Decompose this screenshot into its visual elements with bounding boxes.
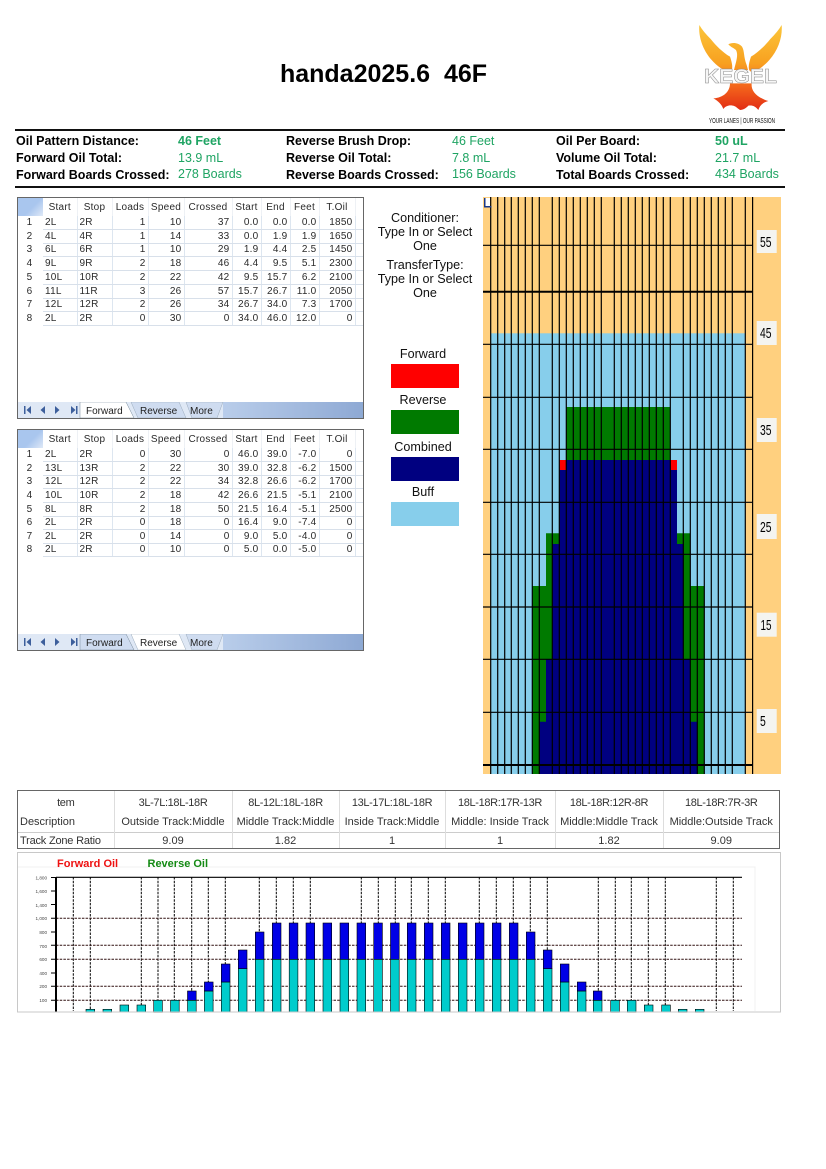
distance labels: 45 xyxy=(760,326,772,342)
panel: forward table: Loads xyxy=(116,202,144,212)
table: track zone ratio: Middle:Middle Track xyxy=(560,816,658,828)
panel: forward table: 12L xyxy=(45,299,62,310)
panel: pattern statistics: Reverse Boards Crossed: xyxy=(286,168,439,182)
panel: reverse table: 22 xyxy=(170,476,182,487)
panel: reverse table: 0 xyxy=(347,544,352,555)
table: track zone ratio: 18L-18R:17R-13R xyxy=(458,796,542,808)
panel: forward table: 6L xyxy=(45,244,57,255)
panel: pattern statistics: 7.8 mL xyxy=(452,150,490,164)
panel: pattern statistics: 156 Boards xyxy=(452,167,516,181)
y axis labels: 1,400 xyxy=(36,903,47,908)
panel: reverse table: 39.0 xyxy=(267,449,288,460)
panel: reverse table: T.Oil xyxy=(326,434,348,444)
table: track zone ratio: 1 xyxy=(497,835,503,847)
panel: reverse table: Crossed xyxy=(188,434,228,444)
panel: reverse table: 18 xyxy=(170,517,182,528)
panel: pattern statistics: Forward Boards Crossed: xyxy=(16,168,170,182)
panel: forward table: 37 xyxy=(218,217,230,228)
panel: reverse table: 2100 xyxy=(329,490,352,500)
right wing xyxy=(749,25,782,72)
panel: forward table: 33 xyxy=(218,230,230,242)
table: track zone ratio: 9.09 xyxy=(711,835,732,847)
panel: forward table: 46.0 xyxy=(267,312,288,324)
panel: reverse table: 4 xyxy=(27,490,32,500)
panel: reverse table: 2R xyxy=(80,449,93,460)
panel: reverse table: 2 xyxy=(140,490,146,500)
panel: reverse table: 2R xyxy=(80,544,93,555)
panel: forward table: 0.0 xyxy=(273,217,288,228)
panel: forward table: 42 xyxy=(218,272,230,282)
panel: reverse table: 8L xyxy=(45,504,57,514)
distance labels: 55 xyxy=(760,235,772,251)
panel: forward table: 18 xyxy=(170,258,182,268)
panel: pattern statistics: Reverse Brush Drop: xyxy=(286,134,411,148)
panel: forward table: 5 xyxy=(27,272,32,282)
panel: reverse table: 50 xyxy=(218,504,230,514)
panel: reverse table: Start xyxy=(235,434,258,444)
panel: reverse table: 2 xyxy=(140,504,146,514)
panel: forward table: End xyxy=(266,202,285,212)
table: track zone ratio: Track Zone Ratio xyxy=(20,835,101,847)
legend: combined: Combined xyxy=(394,440,452,454)
divider top xyxy=(15,129,785,131)
bars xyxy=(86,923,704,1012)
sheet tabs: forward active: More xyxy=(190,406,213,417)
panel: forward table: 26 xyxy=(170,299,182,310)
panel: reverse table: 1 xyxy=(27,449,32,460)
panel: forward table: 29 xyxy=(218,244,230,255)
panel: forward table: 0.0 xyxy=(244,230,258,242)
text block: conditioner: Type In or Select xyxy=(378,225,472,239)
axes xyxy=(56,876,742,878)
panel: forward table: 7 xyxy=(27,299,32,310)
panel: reverse table: 32.8 xyxy=(267,462,288,474)
panel: pattern statistics xyxy=(16,134,779,182)
panel: forward table: 2300 xyxy=(329,258,352,268)
panel: forward table: 2100 xyxy=(329,272,352,282)
panel: pattern statistics: 13.9 mL xyxy=(178,150,223,164)
text block: conditioner: Conditioner: xyxy=(391,211,459,225)
panel: forward table: 2L xyxy=(45,312,57,324)
panel: forward table: Feet xyxy=(294,202,315,212)
sheet tabs: forward active xyxy=(18,402,363,418)
panel: reverse table: 12L xyxy=(45,476,62,487)
panel: forward table: 30 xyxy=(170,312,182,324)
y axis labels xyxy=(36,876,47,1003)
panel: forward table: 10L xyxy=(45,272,62,282)
text block: transfer type: Type In or Select xyxy=(378,272,472,286)
panel: forward table: 1.9 xyxy=(302,230,316,242)
table: track zone ratio: Description xyxy=(20,816,75,828)
legend: forward xyxy=(391,347,459,388)
y axis labels: 100 xyxy=(39,998,47,1003)
chart: oil per board bar chart xyxy=(17,852,781,1013)
panel: reverse table: 5.0 xyxy=(273,530,288,542)
panel: reverse table: 5 xyxy=(27,504,32,514)
distance labels: 25 xyxy=(760,520,772,536)
panel: pattern statistics: Oil Per Board: xyxy=(556,134,640,148)
panel: forward table: 4 xyxy=(27,258,32,268)
panel: forward table: 1700 xyxy=(329,299,352,310)
panel: forward table: 10 xyxy=(170,217,182,228)
panel: pattern statistics: Reverse Oil Total: xyxy=(286,151,391,165)
table: track zone ratio: Middle:Outside Track xyxy=(670,816,773,828)
panel: forward table: 4.4 xyxy=(273,244,288,255)
panel: forward table: 2R xyxy=(80,217,93,228)
panel: forward table: 0.0 xyxy=(244,217,258,228)
title: handa2025.6 46F xyxy=(280,60,487,88)
panel: forward table: 57 xyxy=(218,286,230,296)
panel: forward table: 12.0 xyxy=(296,312,316,324)
panel: forward table: 11.0 xyxy=(297,286,316,296)
panel: forward table: 6.2 xyxy=(302,272,316,282)
buff area xyxy=(491,333,745,774)
panel: reverse table: 2L xyxy=(45,449,57,460)
panel: reverse table: 18 xyxy=(170,490,182,500)
left wing xyxy=(699,25,732,72)
panel: forward table: 1850 xyxy=(329,217,352,228)
text block: conditioner: One xyxy=(413,239,437,253)
sheet tabs: reverse active: Reverse xyxy=(140,638,178,649)
panel: reverse table: 0 xyxy=(140,544,146,555)
panel: reverse table: -7.4 xyxy=(298,517,316,528)
panel: forward table: 34 xyxy=(218,299,230,310)
panel: forward table: 26 xyxy=(170,286,182,296)
panel: forward table: 4.4 xyxy=(244,258,258,268)
panel: forward table: 4L xyxy=(45,230,57,242)
panel: forward table: 9L xyxy=(45,258,57,268)
panel: forward table: 2 xyxy=(27,230,32,242)
logo wordmark: KEGEL xyxy=(704,66,777,88)
origin marker xyxy=(484,198,490,207)
panel: reverse table: 2 xyxy=(140,462,146,474)
panel: reverse table: 13L xyxy=(45,462,62,474)
panel: reverse table: 32.8 xyxy=(238,476,258,487)
legend: buff xyxy=(391,485,459,526)
panel: forward table: 1 xyxy=(140,217,146,228)
sheet tabs: reverse active: Forward xyxy=(86,638,123,649)
panel: forward table: 11L xyxy=(45,286,62,296)
panel: reverse table: 0 xyxy=(140,449,146,460)
panel: forward table: 26.7 xyxy=(267,286,288,296)
panel: reverse table: 2 xyxy=(27,462,32,474)
panel: forward table: 46 xyxy=(218,258,230,268)
panel: reverse table: 2 xyxy=(140,476,146,487)
table: track zone ratio xyxy=(17,790,780,849)
panel: reverse table: 2L xyxy=(45,517,57,528)
panel: forward table: 6 xyxy=(27,286,32,296)
table: track zone ratio: 3L-7L:18L-18R xyxy=(139,796,207,808)
panel: reverse table: 39.0 xyxy=(238,462,258,474)
panel: pattern statistics: Total Boards Crossed: xyxy=(556,168,689,182)
panel: reverse table: 6 xyxy=(27,517,32,528)
panel: reverse table: -4.0 xyxy=(298,530,316,542)
panel: reverse table: 0 xyxy=(224,544,230,555)
panel: reverse table: 13R xyxy=(80,462,99,474)
panel: reverse table: 21.5 xyxy=(267,490,288,500)
panel: forward table: 1.9 xyxy=(273,230,288,242)
panel: forward table: 9R xyxy=(80,258,93,268)
panel: reverse table: -6.2 xyxy=(298,462,316,474)
panel: forward table: 2L xyxy=(45,217,57,228)
panel: pattern statistics: 278 Boards xyxy=(178,167,242,181)
panel: reverse table: 22 xyxy=(170,462,182,474)
text block: conditioner xyxy=(378,211,472,253)
head and neck xyxy=(728,43,748,70)
panel: reverse table: 3 xyxy=(27,476,32,487)
panel: reverse table: 10L xyxy=(45,490,62,500)
panel: forward table: 7.3 xyxy=(302,299,316,310)
table: track zone ratio: Middle Track:Middle xyxy=(237,816,334,828)
table: track zone ratio: 13L-17L:18L-18R xyxy=(352,796,432,808)
panel: reverse table: 0 xyxy=(347,517,352,528)
panel: forward table: 15.7 xyxy=(238,286,258,296)
sheet tabs: forward active: Forward xyxy=(86,406,123,417)
panel: reverse table: -7.0 xyxy=(298,449,316,460)
panel: reverse table: 46.0 xyxy=(238,449,258,460)
panel: forward table: 9.5 xyxy=(273,258,288,268)
panel: forward table: 0 xyxy=(224,312,230,324)
panel: reverse table: 10 xyxy=(170,544,182,555)
panel: reverse table: 14 xyxy=(170,530,182,542)
sheet tabs: reverse active xyxy=(18,634,363,650)
panel: reverse table: 0 xyxy=(224,449,230,460)
panel: reverse table: 0 xyxy=(140,517,146,528)
panel: forward table: 2 xyxy=(140,299,146,310)
panel: forward table: 1 xyxy=(27,217,32,228)
panel: reverse table: 7 xyxy=(27,530,32,542)
panel: forward table: 1 xyxy=(140,230,146,242)
panel: reverse table: 1700 xyxy=(329,476,352,487)
panel: forward table: 1.9 xyxy=(244,244,258,255)
panel: forward table: 2.5 xyxy=(302,244,316,255)
panel: forward table: 15.7 xyxy=(267,272,288,282)
panel: forward table: 10R xyxy=(80,272,99,282)
table: track zone ratio: 18L-18R:7R-3R xyxy=(685,796,758,808)
table: track zone ratio: 1.82 xyxy=(275,835,296,847)
panel: reverse table: 21.5 xyxy=(238,504,258,514)
panel: forward table: 12R xyxy=(80,299,99,310)
legend: reverse: Reverse xyxy=(400,393,446,407)
legend: forward: Forward xyxy=(400,347,446,361)
panel: forward table: 26.7 xyxy=(238,299,258,310)
panel: reverse table: 8 xyxy=(27,544,32,555)
panel: reverse table: 2500 xyxy=(329,504,352,514)
panel: reverse table: -5.0 xyxy=(298,544,316,555)
panel: forward table: Start xyxy=(235,202,258,212)
panel: forward table: 9.5 xyxy=(244,272,258,282)
sheet tabs: forward active: Reverse xyxy=(140,406,178,417)
panel: forward table: 11R xyxy=(80,286,98,296)
panel: pattern statistics: 46 Feet xyxy=(178,134,221,148)
panel: forward table: Crossed xyxy=(188,202,228,212)
panel: forward table: 5.1 xyxy=(302,258,316,268)
text block: transfer type: One xyxy=(413,286,437,300)
table: track zone ratio: 1 xyxy=(389,835,395,847)
panel: forward table: 14 xyxy=(170,230,182,242)
chart legend: forward oil: Forward Oil xyxy=(57,858,118,870)
sheet tabs: reverse active: More xyxy=(190,638,213,649)
panel: reverse table: Speed xyxy=(151,434,181,444)
panel: reverse table: 0 xyxy=(347,530,352,542)
text block: transfer type xyxy=(378,258,472,300)
panel: pattern statistics: 50 uL xyxy=(715,134,748,148)
reverse oil area xyxy=(532,407,704,774)
divider bottom xyxy=(15,186,785,188)
panel: reverse table: 8R xyxy=(80,504,93,514)
panel: forward table: 34.0 xyxy=(267,299,288,310)
panel: reverse table: -5.1 xyxy=(298,490,316,500)
y axis labels: 600 xyxy=(39,957,47,962)
panel: reverse table: Start xyxy=(49,434,71,444)
panel: reverse table: Stop xyxy=(84,434,105,444)
panel: reverse table: 5.0 xyxy=(244,544,258,555)
board lines xyxy=(483,197,753,774)
panel: forward table xyxy=(17,197,364,419)
panel: reverse table: 16.4 xyxy=(267,504,288,514)
panel: forward table: Start xyxy=(49,202,71,212)
panel: forward table: 0 xyxy=(140,312,146,324)
y axis labels: 800 xyxy=(39,930,47,935)
panel: forward table: 34.0 xyxy=(238,312,258,324)
panel: pattern statistics: Forward Oil Total: xyxy=(16,151,122,165)
grid lines xyxy=(56,877,742,1011)
icon: Kegel phoenix logo xyxy=(699,25,782,125)
panel: reverse table: Loads xyxy=(116,434,144,444)
panel: forward table: 1450 xyxy=(329,244,352,255)
distance labels: 15 xyxy=(760,618,772,634)
panel: reverse table: -6.2 xyxy=(298,476,316,487)
panel: forward table: Speed xyxy=(151,202,181,212)
panel: forward table: 2 xyxy=(140,258,146,268)
table: track zone ratio: 1.82 xyxy=(598,835,620,847)
panel: pattern statistics: Volume Oil Total: xyxy=(556,151,657,165)
panel: forward table: Stop xyxy=(84,202,105,212)
legend: reverse xyxy=(391,393,459,434)
panel: reverse table xyxy=(17,429,364,651)
table: track zone ratio: tem xyxy=(57,797,74,809)
tail flames xyxy=(713,83,768,110)
panel: forward table: 6R xyxy=(80,244,93,255)
panel: reverse table: 26.6 xyxy=(267,476,288,487)
panel: forward table: 10 xyxy=(170,244,182,255)
y axis labels: 1,000 xyxy=(36,916,47,921)
distance labels: 5 xyxy=(760,714,766,730)
table: track zone ratio: 9.09 xyxy=(162,835,184,847)
chart legend: reverse oil: Reverse Oil xyxy=(148,858,208,870)
y axis labels: 700 xyxy=(39,944,47,949)
panel: reverse table: 0 xyxy=(347,449,352,460)
panel: reverse table: 0.0 xyxy=(273,544,288,555)
y axis labels: 1,800 xyxy=(36,876,47,880)
panel: reverse table: 1500 xyxy=(329,462,352,474)
panel: reverse table: 42 xyxy=(218,490,230,500)
table: track zone ratio: 8L-12L:18L-18R xyxy=(248,796,323,808)
forward only markers xyxy=(559,460,677,470)
panel: reverse table: 10R xyxy=(80,490,99,500)
table: track zone ratio: 18L-18R:12R-8R xyxy=(570,796,648,808)
panel: forward table: 4R xyxy=(80,230,93,242)
y axis labels: 200 xyxy=(39,984,47,989)
panel: reverse table: 2L xyxy=(45,530,57,542)
text block: transfer type: TransferType: xyxy=(386,258,464,272)
panel: forward table: 8 xyxy=(27,312,32,324)
panel: pattern statistics: 21.7 mL xyxy=(715,150,760,164)
table: track zone ratio: Outside Track:Middle xyxy=(121,816,225,828)
panel: reverse table: -5.1 xyxy=(298,504,316,514)
panel: forward table: 3 xyxy=(140,286,146,296)
legend: combined xyxy=(391,440,459,481)
panel: reverse table: 18 xyxy=(170,504,182,514)
distance labels xyxy=(757,230,777,733)
panel: reverse table: 0 xyxy=(140,530,146,542)
panel: forward table: 2R xyxy=(80,312,93,324)
y axis labels: 1,600 xyxy=(36,889,47,894)
panel: reverse table: End xyxy=(266,434,285,444)
panel: reverse table: 0 xyxy=(224,517,230,528)
legend: buff: Buff xyxy=(412,485,434,499)
panel: reverse table: 9.0 xyxy=(244,530,258,542)
panel: reverse table: 30 xyxy=(218,462,230,474)
combined oil area xyxy=(539,460,697,774)
panel: reverse table: 9.0 xyxy=(273,517,288,528)
panel: forward table: 3 xyxy=(27,244,32,255)
panel: forward table: 1 xyxy=(140,244,146,255)
chart: oil pattern graph xyxy=(483,197,781,774)
panel: forward table: 2 xyxy=(140,272,146,282)
panel: pattern statistics: 46 Feet xyxy=(452,134,494,148)
panel: reverse table: 0 xyxy=(224,530,230,542)
y axis labels: 400 xyxy=(39,971,47,976)
table: track zone ratio: Inside Track:Middle xyxy=(345,816,439,828)
panel: reverse table: Feet xyxy=(294,434,315,444)
panel: forward table: 22 xyxy=(170,272,182,282)
panel: pattern statistics: 434 Boards xyxy=(715,167,779,181)
panel: forward table: 0.0 xyxy=(302,217,316,228)
panel: reverse table: 30 xyxy=(170,449,182,460)
distance labels: 35 xyxy=(760,423,772,439)
panel: reverse table: 12R xyxy=(80,476,99,487)
panel: pattern statistics: Oil Pattern Distance: xyxy=(16,134,139,148)
panel: reverse table: 2L xyxy=(45,544,57,555)
panel: forward table: T.Oil xyxy=(326,202,348,212)
panel: reverse table: 2R xyxy=(80,517,93,528)
panel: reverse table: 2R xyxy=(80,530,93,542)
panel: forward table: 1650 xyxy=(329,230,352,242)
panel: reverse table: 16.4 xyxy=(238,517,258,528)
panel: reverse table: 34 xyxy=(218,476,230,487)
panel: forward table: 2050 xyxy=(329,286,352,296)
panel: reverse table: 26.6 xyxy=(238,490,258,500)
panel: forward table: 0 xyxy=(347,312,352,324)
table: track zone ratio: Middle: Inside Track xyxy=(451,816,549,828)
